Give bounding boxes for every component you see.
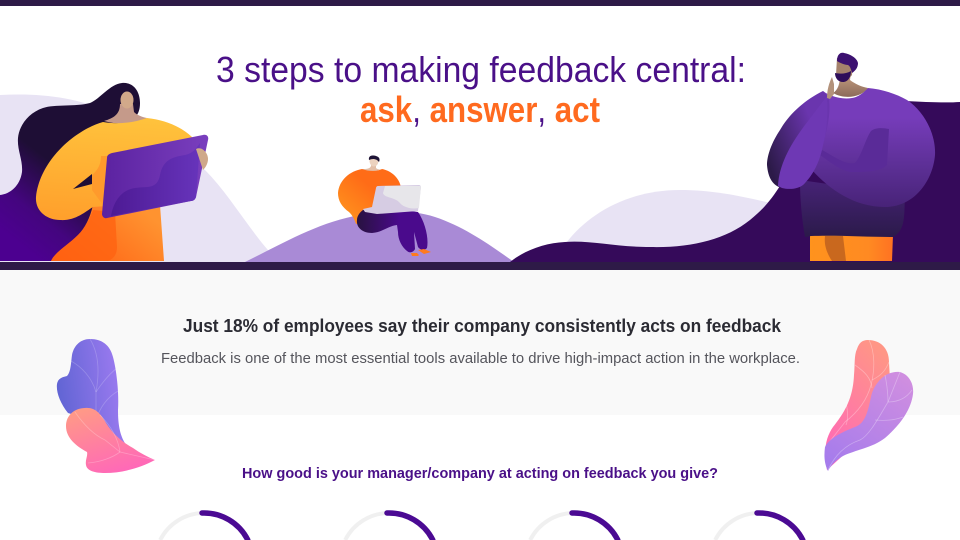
figure: seated person with laptop	[338, 155, 431, 256]
head	[362, 161, 381, 171]
ground bar	[0, 262, 960, 270]
gauge 3	[530, 513, 618, 540]
intro heading: Just 18% of employees say their company consistently acts on feedback	[183, 316, 782, 336]
orange sweater	[338, 169, 401, 224]
icon: left leaves	[57, 339, 155, 473]
icon: right leaves	[824, 340, 913, 471]
beard	[835, 71, 851, 82]
legs	[357, 210, 428, 252]
tablet	[102, 135, 208, 218]
dark wave right	[510, 101, 960, 262]
hair	[837, 53, 858, 73]
figure: woman with tablet	[0, 83, 208, 261]
gauge 2	[345, 513, 433, 540]
lavender hill right	[566, 190, 775, 262]
laptop	[363, 185, 421, 214]
sweater body	[812, 88, 935, 207]
title line 2: ask, answer, act	[360, 89, 600, 130]
hair	[369, 155, 380, 162]
figure: thinking bearded man	[767, 53, 935, 261]
raised arm	[767, 91, 830, 189]
torso	[800, 180, 905, 237]
hand	[196, 148, 208, 170]
neck	[104, 104, 147, 124]
page sections background	[0, 0, 960, 415]
neck	[833, 72, 868, 97]
intro paragraph: Feedback is one of the most essential tools available to drive high-impact action in the workplace.	[161, 350, 800, 367]
gauge 4	[715, 513, 803, 540]
title line 1: 3 steps to making feedback central:	[216, 49, 746, 90]
sleeve shade	[92, 156, 108, 205]
lavender hill left	[0, 95, 278, 262]
face	[836, 58, 853, 80]
pants	[810, 235, 893, 261]
arm highlight	[778, 96, 827, 189]
face	[120, 92, 134, 108]
arm gap	[73, 174, 92, 189]
folded arm shadow	[820, 128, 889, 172]
skirt	[51, 205, 164, 261]
shoes	[411, 249, 431, 256]
hand	[827, 77, 834, 99]
hair	[0, 83, 140, 261]
purple hill centre	[245, 211, 514, 262]
question heading: How good is your manager/company at acting on feedback you give?	[242, 465, 718, 482]
gauge 1	[160, 513, 248, 540]
title	[216, 49, 746, 130]
sweater	[36, 118, 192, 220]
hero illustration	[0, 53, 960, 270]
